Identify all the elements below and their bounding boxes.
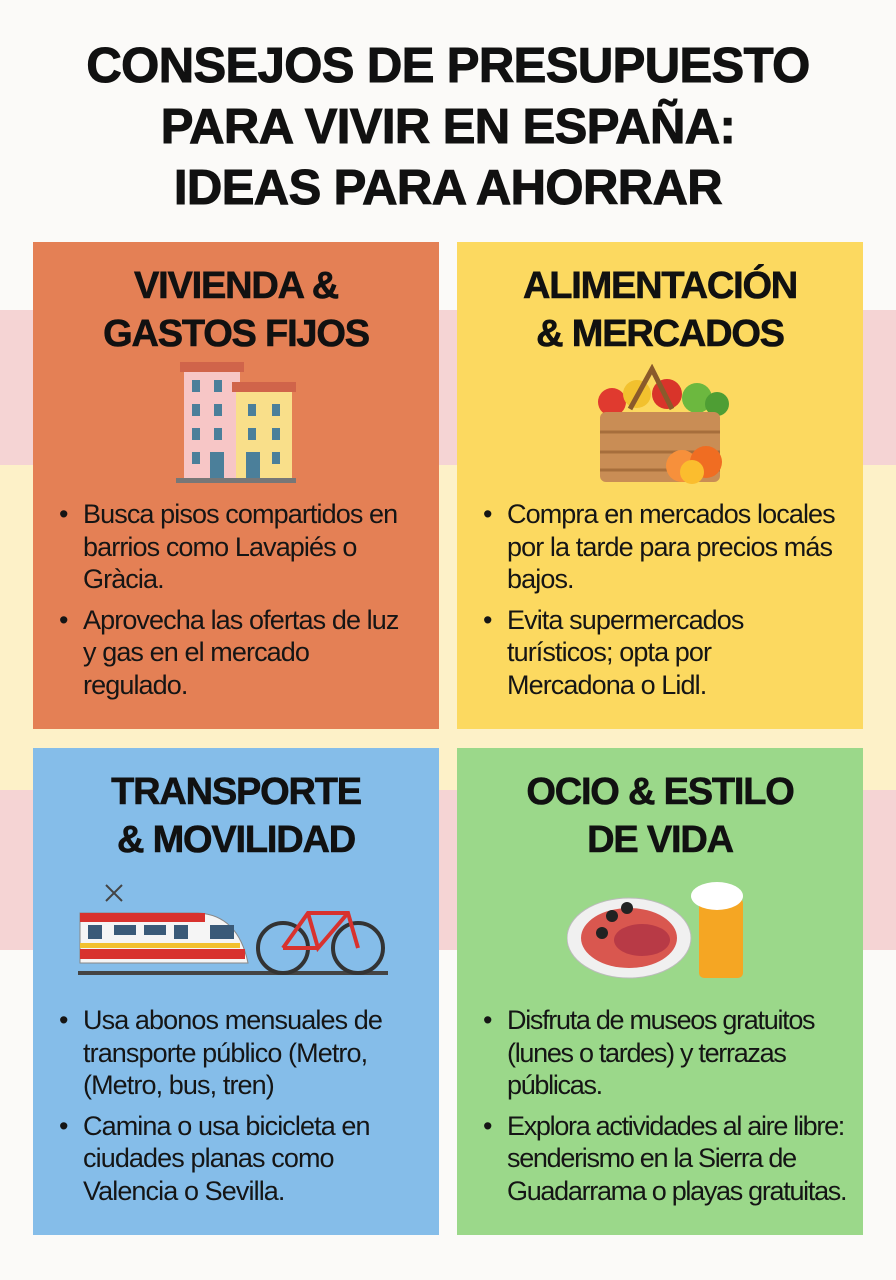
- icon: train and bike: [78, 884, 388, 975]
- title: IDEAS PARA AHORRAR: [174, 161, 722, 215]
- background flag stripes: [0, 310, 896, 465]
- text: transporte tips: Usa abonos mensuales de transporte público (Metro, (Metro, bus, tren): [83, 1005, 382, 1100]
- heading: ocio: [526, 771, 794, 861]
- text: transporte tips: Camina o usa bicicleta en ciudades planas como Valencia o Sevilla.: [83, 1110, 370, 1206]
- panel: transporte: [33, 748, 439, 1235]
- heading: alimentacion: & MERCADOS: [536, 313, 784, 355]
- panel: vivienda: [33, 242, 439, 729]
- text: ocio tips: Disfruta de museos gratuitos (lunes o tardes) y terrazas públicas.: [507, 1005, 814, 1100]
- icon: buildings: [176, 362, 296, 483]
- text: vivienda tips: [60, 499, 398, 700]
- heading: transporte: [111, 771, 361, 861]
- icon: tapas and beer: [567, 882, 743, 978]
- title: CONSEJOS DE PRESUPUESTO: [86, 39, 810, 93]
- text: vivienda tips: Aprovecha las ofertas de luz y gas en el mercado regulado.: [83, 604, 398, 700]
- heading: alimentacion: ALIMENTACIÓN: [523, 265, 797, 307]
- panel: ocio: [457, 748, 863, 1235]
- heading: ocio: DE VIDA: [587, 819, 733, 861]
- heading: vivienda: VIVIENDA &: [134, 265, 338, 307]
- icon: basket: [598, 364, 729, 484]
- heading: alimentacion: [523, 264, 797, 355]
- title: [86, 39, 810, 215]
- heading: vivienda: [103, 265, 369, 355]
- panel: alimentacion: [457, 242, 863, 729]
- heading: transporte: TRANSPORTE: [111, 771, 361, 813]
- heading: vivienda: GASTOS FIJOS: [103, 313, 369, 355]
- heading: ocio: OCIO & ESTILO: [526, 771, 794, 813]
- title: PARA VIVIR EN ESPAÑA:: [161, 100, 735, 154]
- text: ocio tips: Explora actividades al aire libre: senderismo en la Sierra de Guadarrama o playas gratuitas.: [507, 1110, 846, 1206]
- text: transporte tips: [60, 1005, 382, 1206]
- heading: transporte: & MOVILIDAD: [117, 819, 355, 861]
- text: ocio tips: [484, 1005, 846, 1206]
- text: alimentacion tips: Evita supermercados turísticos; opta por Mercadona o Lidl.: [507, 604, 744, 700]
- text: vivienda tips: Busca pisos compartidos en barrios como Lavapiés o Gràcia.: [83, 499, 397, 594]
- text: alimentacion tips: Compra en mercados locales por la tarde para precios más bajos.: [507, 499, 835, 594]
- text: alimentacion tips: [484, 499, 835, 700]
